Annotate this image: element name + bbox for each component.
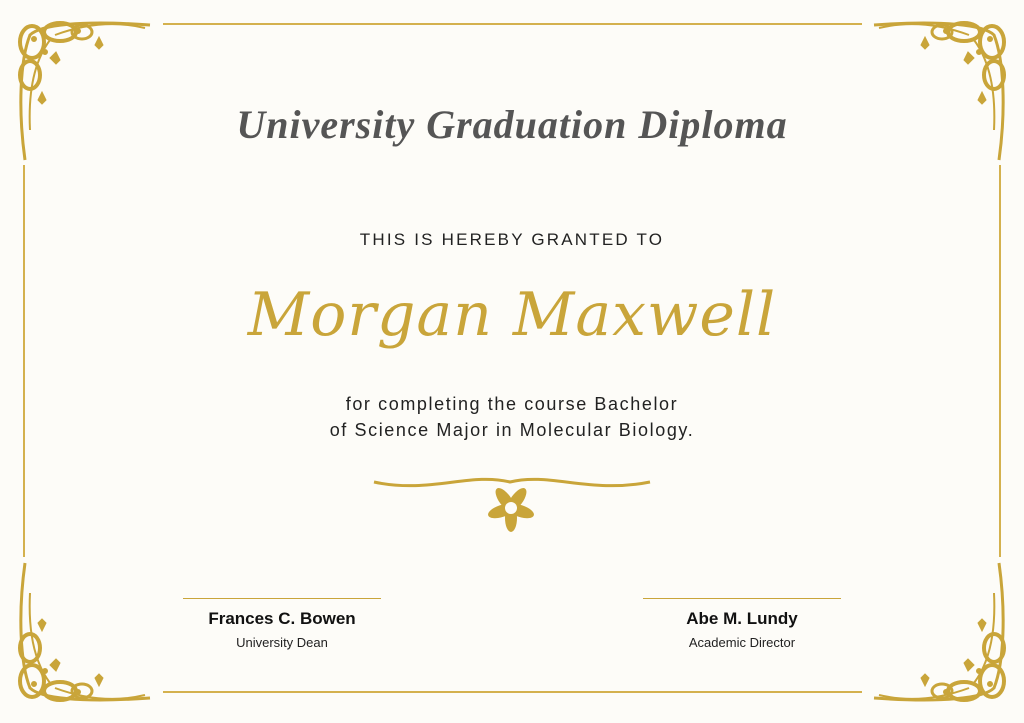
- signature: left: University Dean: [236, 635, 328, 650]
- granted line: THIS IS HEREBY GRANTED TO: [360, 230, 664, 249]
- signature: left: Frances C. Bowen: [208, 609, 356, 628]
- signature: right: Academic Director: [689, 635, 795, 650]
- course description: of Science Major in Molecular Biology.: [330, 420, 694, 440]
- course description: [330, 394, 694, 440]
- title: University Graduation Diploma: [236, 102, 788, 147]
- signature: right: [643, 598, 841, 650]
- signature: right: Abe M. Lundy: [686, 609, 798, 628]
- ornament: flourish divider: [374, 478, 650, 532]
- recipient name: Morgan Maxwell: [248, 280, 776, 350]
- course description: for completing the course Bachelor: [346, 394, 678, 414]
- signature: left: [183, 598, 381, 650]
